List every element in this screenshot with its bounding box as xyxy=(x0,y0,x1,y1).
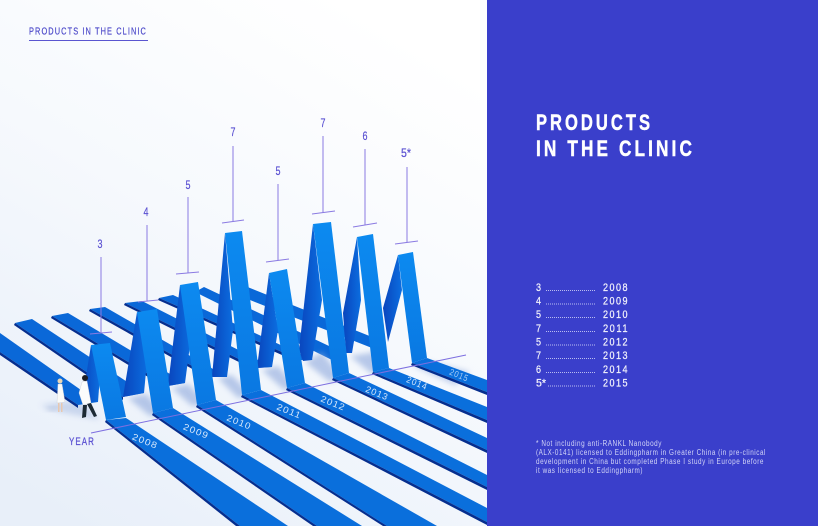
year labels on ribbons: 2008 xyxy=(131,432,160,451)
year labels on ribbons: 2014 xyxy=(405,374,429,392)
miniature figures: two doctors xyxy=(46,375,97,418)
ribbon 2011 xyxy=(89,231,487,525)
year labels on ribbons: 2011 xyxy=(275,402,303,421)
panel title: IN THE CLINIC xyxy=(536,136,695,161)
list of counts by year: 2009 xyxy=(603,296,629,308)
small page heading: PRODUCTS IN THE CLINIC xyxy=(29,26,147,38)
year labels on ribbons: 2010 xyxy=(225,413,253,432)
value numbers: 5* xyxy=(401,146,411,160)
year labels on ribbons: 2013 xyxy=(364,384,390,402)
value numbers: 4 xyxy=(144,205,149,219)
footnote: development in China but completed Phase I study in Europe before xyxy=(536,457,764,466)
list of counts by year: 5 xyxy=(536,309,541,321)
photo background xyxy=(0,0,487,526)
value numbers: 6 xyxy=(362,129,368,143)
ribbon 2014 xyxy=(195,234,487,423)
year labels on ribbons xyxy=(131,367,470,451)
list of counts by year: 2013 xyxy=(603,350,629,362)
figure: woman in white coat xyxy=(46,378,65,412)
value numbers: 7 xyxy=(230,125,236,139)
ribbon 2009 xyxy=(14,309,362,526)
value numbers: 5 xyxy=(276,164,281,178)
list of counts by year: 2010 xyxy=(603,309,629,321)
year labels on ribbons: 2012 xyxy=(319,394,347,413)
figure: man in white coat xyxy=(79,375,97,418)
year axis line xyxy=(91,355,466,433)
ribbon 2012 xyxy=(124,269,487,490)
right panel xyxy=(487,0,818,526)
panel title: PRODUCTS xyxy=(536,110,653,135)
list of counts by year: 7 xyxy=(536,323,541,335)
list of counts by year: 6 xyxy=(536,364,541,376)
value numbers: 3 xyxy=(98,237,103,251)
year labels on ribbons: 2015 xyxy=(448,367,470,384)
value numbers: 7 xyxy=(320,116,326,130)
axis title: YEAR: YEAR xyxy=(69,436,95,448)
small page heading xyxy=(29,26,148,40)
list of counts by year: 4 xyxy=(536,296,541,308)
ribbon 2015 xyxy=(234,252,487,395)
list of counts by year: 2015 xyxy=(603,378,629,390)
list of counts by year: 2008 xyxy=(603,282,629,294)
ribbon 2008 xyxy=(0,333,288,526)
ribbon 2010 xyxy=(51,282,437,526)
value numbers xyxy=(98,116,411,251)
list of counts by year: 3 xyxy=(536,282,541,294)
list of counts by year: 5* xyxy=(536,378,547,390)
panel title xyxy=(536,110,695,161)
list of counts by year: 7 xyxy=(536,350,541,362)
footnote xyxy=(536,439,766,475)
footnote: it was licensed to Eddingpharm) xyxy=(536,466,643,475)
footnote: * Not including anti-RANKL Nanobody xyxy=(536,439,662,448)
ribbon 2013 xyxy=(158,222,487,453)
list of counts by year: 5 xyxy=(536,336,541,348)
value markers: stems, ticks and numbers xyxy=(90,136,418,334)
list of counts by year: 2012 xyxy=(603,336,629,348)
value numbers: 5 xyxy=(186,178,191,192)
list of counts by year: 2014 xyxy=(603,364,629,376)
chart: folded ribbon bars by year xyxy=(0,116,487,526)
list of counts by year: 2011 xyxy=(603,323,629,335)
year labels on ribbons: 2009 xyxy=(182,422,211,441)
list of counts by year xyxy=(536,282,629,390)
